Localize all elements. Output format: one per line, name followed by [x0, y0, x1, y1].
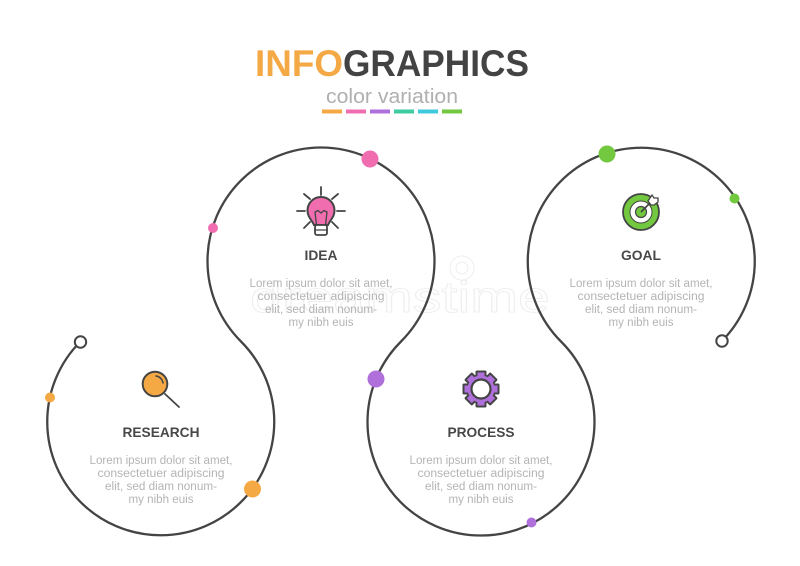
step: research: Lorem ipsum dolor sit amet,	[90, 455, 233, 467]
title	[255, 43, 529, 84]
step: idea: my nibh euis	[288, 317, 354, 329]
step: goal	[570, 247, 712, 329]
icon: gear	[462, 370, 500, 408]
step: idea: IDEA	[304, 247, 338, 263]
connected circular timeline path	[47, 147, 755, 536]
step: idea: consectetuer adipiscing	[258, 291, 384, 303]
step: research: RESEARCH	[122, 424, 200, 440]
step: process: Lorem ipsum dolor sit amet,	[410, 455, 552, 467]
color swatches	[322, 110, 462, 114]
step: process: elit, sed diam nonum-	[425, 481, 537, 493]
step: goal: consectetuer adipiscing	[578, 291, 704, 303]
step: process: PROCESS	[448, 424, 514, 440]
dot: process large	[368, 370, 384, 388]
subtitle: color variation	[326, 86, 458, 108]
end marker	[716, 335, 728, 347]
watermark: dreamstime	[250, 273, 550, 322]
dot: idea small	[208, 223, 218, 233]
step: idea: elit, sed diam nonum-	[265, 304, 377, 316]
step: process: consectetuer adipiscing	[418, 468, 544, 480]
step: goal: elit, sed diam nonum-	[585, 304, 697, 316]
step: research: consectetuer adipiscing	[98, 468, 224, 480]
step: goal: Lorem ipsum dolor sit amet,	[570, 278, 712, 290]
step: goal: GOAL	[621, 247, 661, 263]
step: process: my nibh euis	[448, 494, 514, 506]
dot: idea large	[362, 150, 378, 168]
title: INFO	[255, 43, 343, 84]
icon: magnifier	[143, 372, 179, 407]
start marker	[75, 336, 86, 348]
watermark	[250, 256, 550, 322]
dot: research small	[45, 392, 55, 402]
step: idea	[250, 247, 392, 329]
step: research	[90, 424, 233, 506]
step: process	[410, 424, 552, 506]
dot: goal large	[598, 146, 616, 162]
title: GRAPHICS	[343, 43, 529, 84]
dot: research large	[244, 480, 261, 498]
step: goal: my nibh euis	[608, 317, 674, 329]
step: research: elit, sed diam nonum-	[105, 481, 217, 493]
step: idea: Lorem ipsum dolor sit amet,	[250, 278, 392, 290]
icon: light bulb	[297, 187, 345, 235]
icon: target	[623, 194, 659, 230]
step: research: my nibh euis	[128, 494, 194, 506]
dot: process small	[526, 518, 536, 528]
dot: goal small	[730, 194, 740, 204]
